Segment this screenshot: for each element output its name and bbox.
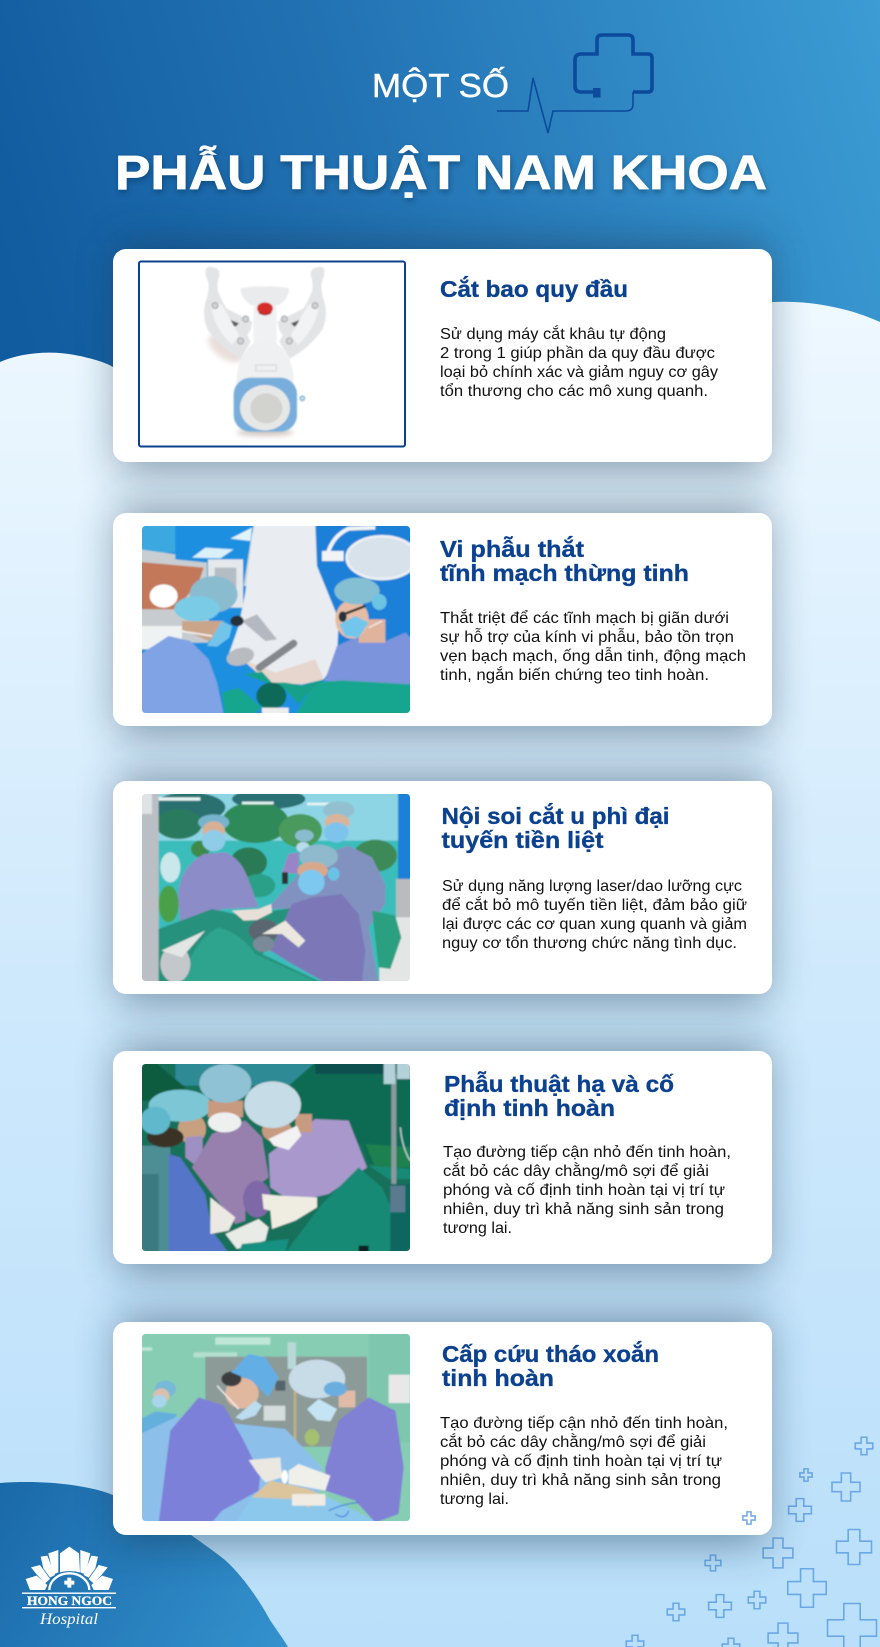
heading: Cấp cứu tháo xoắn bbox=[442, 1340, 659, 1367]
body text: Sử dụng máy cắt khâu tự động bbox=[440, 324, 666, 343]
heading: Vi phẫu thắt bbox=[440, 535, 584, 562]
background: bottom-left blue shape bbox=[0, 1482, 288, 1647]
heading: tinh hoàn bbox=[442, 1365, 554, 1391]
body text: nhiên, duy trì khả năng sinh sản trong bbox=[440, 1472, 721, 1489]
body text: cắt bỏ các dây chằng/mô sợi để giải bbox=[443, 1161, 709, 1180]
heading: tĩnh mạch thừng tinh bbox=[440, 560, 689, 586]
image: microsurgery photo bbox=[142, 526, 410, 713]
title line 2: PHẪU THUẬT NAM KHOA bbox=[115, 145, 767, 200]
body text: Tạo đường tiếp cận nhỏ đến tinh hoàn, bbox=[440, 1415, 728, 1432]
body text: nguy cơ tổn thương chức năng tình dục. bbox=[442, 934, 737, 952]
heading: Cắt bao quy đầu bbox=[440, 275, 628, 302]
logo divider line bbox=[22, 1607, 116, 1608]
body text: Tạo đường tiếp cận nhỏ đến tinh hoàn, bbox=[443, 1144, 731, 1161]
heading: định tinh hoàn bbox=[444, 1095, 615, 1121]
body text bbox=[442, 878, 747, 952]
body text: tương lai. bbox=[443, 1220, 512, 1237]
body text: loại bỏ chính xác và giảm nguy cơ gây bbox=[440, 364, 718, 381]
body text: Thắt triệt để các tĩnh mạch bị giãn dưới bbox=[440, 608, 729, 627]
body text bbox=[443, 1144, 731, 1237]
title line 1: MỘT SỐ bbox=[372, 66, 509, 104]
heading: Phẫu thuật hạ và cố bbox=[444, 1070, 674, 1097]
image: emergency surgery photo bbox=[142, 1334, 410, 1521]
heading bbox=[442, 1340, 659, 1391]
body text: Sử dụng năng lượng laser/dao lưỡng cực bbox=[442, 878, 742, 895]
logo wordmark: HONG NGOC bbox=[27, 1593, 112, 1608]
heading bbox=[442, 802, 670, 853]
icon: ECG line and medical cross bbox=[497, 35, 652, 133]
logo: Hong Ngoc Hospital bbox=[22, 1547, 116, 1628]
panel: Cấp cứu tháo xoắn tinh hoàn bbox=[113, 1316, 772, 1544]
body text: 2 trong 1 giúp phần da quy đầu được bbox=[440, 345, 715, 362]
heading bbox=[440, 535, 689, 586]
body text: phóng và cố định tinh hoàn tại vị trí tự bbox=[440, 1453, 722, 1470]
body text bbox=[440, 1415, 728, 1508]
decorative crosses bbox=[626, 1437, 876, 1647]
body text: nhiên, duy trì khả năng sinh sản trong bbox=[443, 1201, 724, 1218]
body text: cắt bỏ các dây chằng/mô sợi để giải bbox=[440, 1432, 706, 1451]
panel: Phẫu thuật hạ và cố định tinh hoàn bbox=[113, 1045, 772, 1273]
image: circumcision stapler device bbox=[139, 262, 405, 446]
header title block bbox=[115, 35, 767, 200]
logo divider line bbox=[22, 1592, 116, 1594]
panel: Nội soi cắt u phì đại tuyến tiền liệt bbox=[113, 775, 772, 1003]
body text bbox=[440, 608, 746, 684]
logo script: Hospital bbox=[39, 1611, 99, 1628]
image: orchiopexy surgery photo bbox=[142, 1064, 410, 1251]
body text: tương lai. bbox=[440, 1491, 509, 1508]
body text: vẹn bạch mạch, ống dẫn tinh, động mạch bbox=[440, 646, 746, 665]
heading: tuyến tiền liệt bbox=[442, 827, 604, 853]
body text: phóng và cố định tinh hoàn tại vị trí tự bbox=[443, 1182, 725, 1199]
image: endoscopic surgery team photo bbox=[142, 794, 410, 981]
body text: tổn thương cho các mô xung quanh. bbox=[440, 382, 708, 400]
body text: lại được các cơ quan xung quanh và giảm bbox=[442, 916, 747, 933]
heading bbox=[444, 1070, 674, 1121]
body text: tinh, ngắn biến chứng teo tinh hoàn. bbox=[440, 665, 709, 684]
body text: sự hỗ trợ của kính vi phẫu, bảo tồn trọn bbox=[440, 627, 734, 646]
panel: Cắt bao quy đầu bbox=[113, 243, 772, 471]
icon: small cross on card bbox=[743, 1512, 755, 1524]
body text bbox=[440, 324, 718, 400]
panel: Vi phẫu thắt tĩnh mạch thừng tinh bbox=[113, 507, 772, 735]
icon: lotus bbox=[26, 1547, 113, 1590]
body text: để cắt bỏ mô tuyến tiền liệt, đảm bảo giữ bbox=[442, 895, 747, 914]
heading: Nội soi cắt u phì đại bbox=[442, 802, 670, 829]
